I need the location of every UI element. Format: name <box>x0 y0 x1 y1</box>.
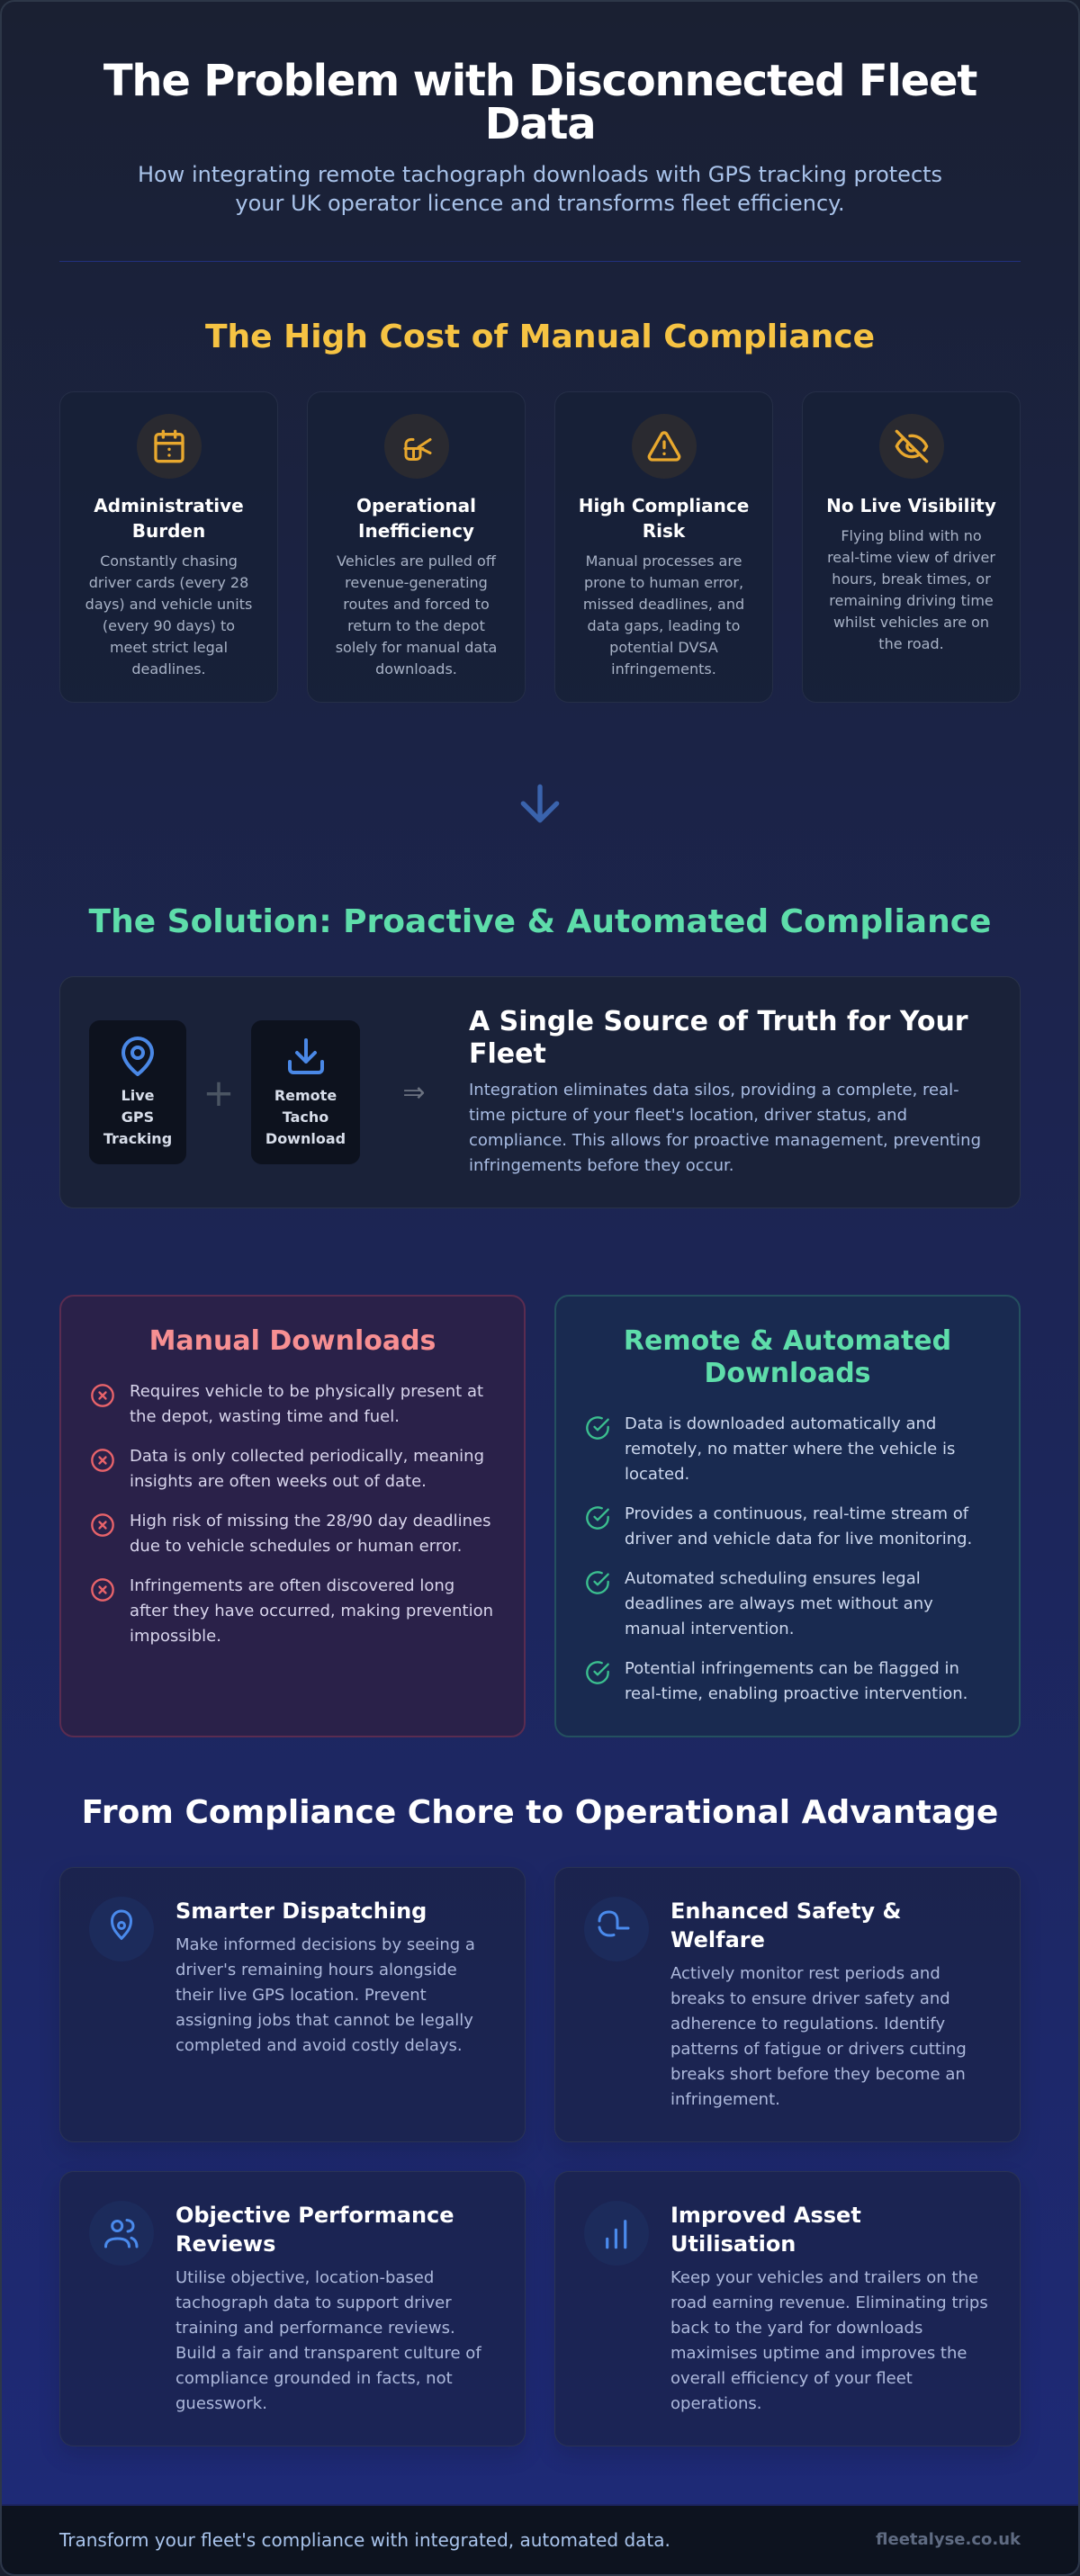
footer <box>2 2504 1078 2574</box>
panel: problem cards <box>59 391 1021 703</box>
icon: safety <box>584 1897 649 1961</box>
symbol: plus: + <box>202 1071 235 1114</box>
icon: vehicle off road <box>383 414 448 479</box>
card text: Manual processes are prone to human error, missed deadlines, and data gaps, leading to potential DVSA infringements. <box>583 552 744 678</box>
card heading: Improved Asset Utilisation <box>670 2203 861 2257</box>
card text <box>670 2203 988 2413</box>
icon: eye off <box>878 414 943 479</box>
card: enhanced safety and welfare <box>554 1867 1021 2142</box>
icon: bar chart <box>584 2201 649 2266</box>
list item: Requires vehicle to be physically present at the depot, wasting time and fuel. <box>130 1382 483 1426</box>
panel heading: Manual Downloads <box>149 1325 436 1357</box>
list item: Data is only collected periodically, meaning insights are often weeks out of date. <box>130 1447 484 1491</box>
card: administrative burden <box>59 391 278 703</box>
list item: High risk of missing the 28/90 day deadlines due to vehicle schedules or human error. <box>130 1512 490 1556</box>
heading: operational advantage: From Compliance Chore to Operational Advantage <box>82 1794 998 1831</box>
card heading: Operational Inefficiency <box>356 495 476 542</box>
card description: Actively monitor rest periods and breaks to ensure driver safety and adherence to regulations. Identify patterns of fatigue or drivers cutting breaks short before they become an infringement. <box>670 1964 967 2109</box>
comparison panels <box>59 1295 1021 1737</box>
tile label <box>103 1087 172 1147</box>
arrow: problem to solution <box>520 785 560 822</box>
card: improved asset utilisation <box>554 2171 1021 2446</box>
list item: Provides a continuous, real-time stream of driver and vehicle data for live monitoring. <box>625 1504 972 1548</box>
tile label: Tacho <box>283 1108 328 1126</box>
tile label: Tracking <box>104 1130 172 1147</box>
tile label <box>266 1087 346 1147</box>
list item: Potential infringements can be flagged in real-time, enabling proactive intervention. <box>625 1659 968 1703</box>
icon: location pin <box>89 1897 154 1961</box>
card: operational inefficiency <box>307 391 526 703</box>
tile: live GPS tracking <box>89 1020 186 1164</box>
card: no live visibility <box>802 391 1021 703</box>
card heading: Administrative Burden <box>94 495 244 542</box>
card description: Keep your vehicles and trailers on the road earning revenue. Eliminating trips back to the yard for downloads maximises uptime and improves the overall efficiency of your fleet operations. <box>670 2268 988 2413</box>
icon: users <box>89 2201 154 2266</box>
title: The Problem with Disconnected Fleet Data <box>104 56 976 149</box>
solution heading: A Single Source of Truth for Your Fleet <box>469 1006 968 1070</box>
list item: Data is downloaded automatically and remotely, no matter where the vehicle is located. <box>625 1414 955 1484</box>
tile label: GPS <box>122 1108 154 1126</box>
footer message: Transform your fleet's compliance with integrated, automated data. <box>59 2529 670 2551</box>
card heading: Smarter Dispatching <box>176 1898 427 1924</box>
header <box>59 59 1021 262</box>
icon: calendar <box>137 414 202 479</box>
card text: Flying blind with no real-time view of driver hours, break times, or remaining driving time whilst vehicles are on the road. <box>827 527 995 652</box>
card heading: No Live Visibility <box>826 495 996 516</box>
card description: Make informed decisions by seeing a driver's remaining hours alongside their live GPS location. Prevent assigning jobs that cannot be legally completed and avoid costly delays. <box>176 1935 475 2055</box>
card heading: Objective Performance Reviews <box>176 2203 454 2257</box>
panel: benefit cards <box>59 1867 1021 2455</box>
card: objective performance reviews <box>59 2171 526 2446</box>
footer website: fleetalyse.co.uk <box>876 2530 1021 2549</box>
list item: Automated scheduling ensures legal deadlines are always met without any manual intervention. <box>625 1569 933 1638</box>
subtitle: How integrating remote tachograph downloads with GPS tracking protects your UK operator licence and transforms fleet efficiency. <box>138 162 942 216</box>
panel: manual downloads <box>59 1295 526 1737</box>
tile label: Live <box>122 1087 154 1104</box>
card: high compliance risk <box>554 391 773 703</box>
list item: Infringements are often discovered long after they have occurred, making prevention impossible. <box>130 1576 493 1646</box>
card text <box>670 1898 967 2109</box>
heading: high cost of manual compliance: The High Cost of Manual Compliance <box>205 319 875 355</box>
tile label: Download <box>266 1130 346 1147</box>
card description: Utilise objective, location-based tachograph data to support driver training and performance reviews. Build a fair and transparent culture of compliance grounded in facts, not guesswork. <box>176 2268 482 2413</box>
card text: Vehicles are pulled off revenue-generating routes and forced to return to the depot solely for manual data downloads. <box>336 552 497 678</box>
card heading: Enhanced Safety & Welfare <box>670 1898 902 1952</box>
solution description: Integration eliminates data silos, providing a complete, real-time picture of your fleet's location, driver status, and compliance. This allows for proactive management, preventing infringements before they occur. <box>469 1081 981 1175</box>
card text: Constantly chasing driver cards (every 28 days) and vehicle units (every 90 days) to meet strict legal deadlines. <box>86 552 252 678</box>
panel: remote and automated downloads <box>554 1295 1021 1737</box>
solution text <box>469 1006 981 1175</box>
card text <box>176 2203 482 2413</box>
card: smarter dispatching <box>59 1867 526 2142</box>
panel: solution <box>59 976 1021 1208</box>
icon: warning triangle <box>632 414 697 479</box>
tile: remote tacho download <box>251 1020 360 1164</box>
icon: map pin <box>122 1037 154 1076</box>
heading: the solution: The Solution: Proactive & Automated Compliance <box>89 903 991 940</box>
tile label: Remote <box>274 1087 337 1104</box>
card text <box>176 1898 475 2055</box>
icon: download <box>288 1038 324 1074</box>
panel heading: Remote & Automated Downloads <box>624 1325 951 1389</box>
symbol: implies arrow: ⇒ <box>402 1076 426 1108</box>
card heading: High Compliance Risk <box>579 495 749 542</box>
